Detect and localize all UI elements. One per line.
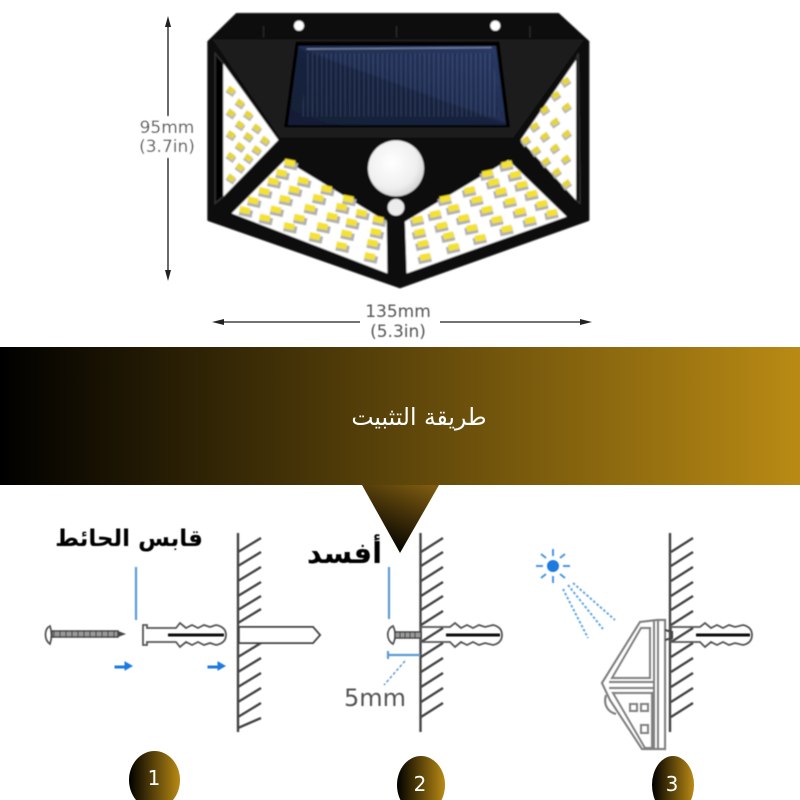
mounting hole left (294, 21, 304, 31)
wall plug in wall (421, 623, 502, 647)
width label: (5.3in) (370, 322, 426, 342)
banner (0, 347, 800, 485)
width label (365, 302, 431, 342)
plug core (446, 634, 500, 636)
upper face (213, 39, 584, 137)
bottom right LED panel (405, 160, 567, 273)
light body (208, 14, 588, 287)
label: screw: أفسد (307, 534, 382, 570)
screw in wall (388, 626, 421, 644)
width arrow (212, 319, 592, 325)
blue leader line (388, 567, 390, 619)
sun icon (536, 549, 570, 583)
number: 3 (666, 772, 678, 796)
plug core (696, 634, 750, 636)
drilled hole (239, 627, 320, 643)
step number 1 (129, 751, 180, 800)
step 1 diagram (46, 526, 320, 732)
blue arrow (115, 662, 132, 670)
number: 1 (148, 766, 160, 790)
left side frame (215, 53, 223, 203)
label: wall plug: قابس الحائط (55, 526, 203, 552)
step number 3 (652, 756, 694, 800)
wall (670, 533, 693, 732)
number: 2 (414, 772, 426, 796)
dashed leader (384, 661, 405, 685)
wall (420, 533, 443, 732)
width label: 135mm (365, 302, 431, 322)
product photo: solar wall light (208, 14, 588, 287)
bottom left LED panel (232, 159, 387, 273)
wall (238, 533, 261, 732)
lamp side profile (602, 620, 672, 749)
height label (136, 116, 198, 158)
light sensor (388, 199, 404, 216)
badge (129, 751, 180, 800)
sun rays (563, 583, 615, 638)
5mm gap bracket (388, 651, 420, 659)
solar panel (284, 42, 510, 127)
height dimension (136, 16, 198, 281)
left LED panel (223, 63, 278, 197)
step number 2 (397, 756, 445, 800)
banner title: طريقة التثبيت (351, 403, 487, 431)
step 2 diagram (307, 533, 502, 732)
banner pointer triangle (362, 485, 439, 553)
width dimension (212, 302, 592, 342)
screw (46, 626, 126, 644)
badge (652, 756, 694, 800)
motion sensor (368, 140, 424, 196)
top band seams (263, 26, 530, 37)
height arrow (165, 16, 171, 281)
height label: (3.7in) (139, 137, 195, 157)
mounting hole right (490, 21, 500, 31)
wall plug (671, 623, 752, 647)
5mm label: 5mm (344, 684, 406, 712)
badge (397, 756, 445, 800)
height label: 95mm (140, 118, 194, 138)
right side frame (576, 53, 580, 203)
right LED panel (520, 60, 576, 200)
wall plug (143, 623, 226, 647)
step 3 diagram (536, 533, 752, 749)
blue arrow (208, 662, 225, 670)
blue leader line (135, 567, 137, 620)
